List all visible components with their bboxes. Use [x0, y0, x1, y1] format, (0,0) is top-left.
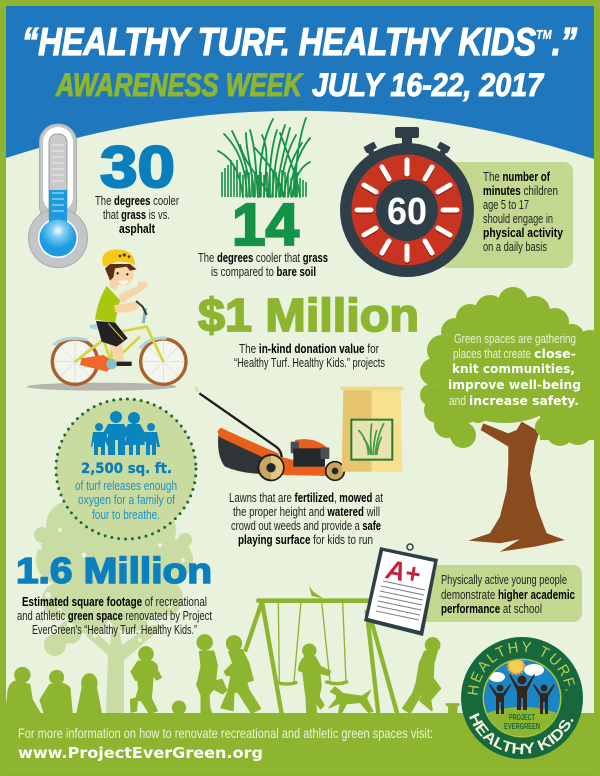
stat: 1.6 Million: Estimated square footage of recreational: [22, 594, 207, 609]
text: lawn care: [229, 490, 383, 547]
stat: $1 Million: $1 Million: [198, 289, 419, 341]
icon: grass: [218, 118, 310, 197]
icon: clipboard with A+: A+: [383, 554, 423, 590]
stat: 14 degrees: The degrees cooler that grass: [198, 250, 328, 265]
silhouette: swing set: [245, 586, 397, 714]
illustration: tree with green spaces message: places that create: [453, 346, 531, 361]
panel: family oxygen circle: four to breathe.: [92, 507, 160, 522]
stat: 30 degrees: that grass is vs.: [103, 207, 170, 222]
stat: 30 degrees: 30: [100, 135, 175, 200]
text: lawn care: Lawns that are fertilized, mowed at: [229, 490, 383, 505]
icon: clipboard with A+: [364, 544, 438, 636]
stat: 1.6 Million: 1.6 Million: [16, 550, 212, 591]
stat: $1 Million: [198, 289, 419, 370]
text: lawn care: the proper height and watered will: [233, 504, 380, 519]
panel: family oxygen circle: [56, 399, 196, 539]
panel: family oxygen circle: of turf releases enough: [75, 478, 177, 493]
stat: 1.6 Million: EverGreen's “Healthy Turf. Healthy Kids.”: [32, 622, 197, 637]
illustration: lawn mower: [195, 387, 344, 480]
footer text: [18, 725, 433, 762]
subtitle: awareness week dates: JULY 16-22, 2017: [312, 67, 545, 103]
panel: academic performance callout: [415, 565, 582, 622]
panel: academic performance callout: performance at school: [441, 601, 542, 616]
icon: stopwatch: [340, 127, 474, 277]
stat: 14 degrees: 14: [232, 192, 299, 258]
stat: $1 Million: “Healthy Turf. Healthy Kids.” projects: [234, 355, 385, 370]
stat: $1 Million: The in-kind donation value for: [239, 341, 380, 356]
logo: Healthy Turf Healthy Kids badge: EVERGREEN: [504, 722, 540, 731]
stat: 14 degrees: [198, 192, 328, 279]
illustration: tree with green spaces message: improve well-being: [448, 378, 581, 392]
logo: Healthy Turf Healthy Kids badge: [461, 637, 583, 759]
stat: 1.6 Million: and athletic green space renovated by Project: [17, 608, 212, 623]
logo: Healthy Turf Healthy Kids badge: HEALTHY KIDS.: [469, 712, 574, 754]
logo: Healthy Turf Healthy Kids badge: PROJECT: [509, 713, 535, 722]
panel: academic performance callout: demonstrate higher academic: [441, 587, 575, 602]
illustration: tree with green spaces message: and: [449, 393, 466, 408]
panel: physical activity callout: The number of: [483, 169, 550, 184]
footer band: [0, 713, 600, 776]
illustration: tree with green spaces message: knit communities,: [452, 362, 575, 376]
illustration: tree with green spaces message: [420, 287, 600, 552]
title: TM: [536, 27, 553, 42]
illustration: tree with green spaces message: close-: [534, 347, 576, 361]
panel: family oxygen circle: 2,500 sq. ft.: [81, 461, 172, 477]
subtitle: awareness week dates: AWARENESS WEEK: [55, 67, 304, 103]
text: lawn care: crowd out weeds and provide a safe: [231, 518, 381, 533]
stat: 30 degrees: [95, 135, 179, 236]
silhouette: children and dog at swings: [197, 635, 459, 714]
background tree: [34, 501, 193, 713]
panel: physical activity callout: should engage in: [483, 211, 553, 226]
icon: family of four: [91, 411, 160, 455]
bicycle: [27, 308, 186, 391]
title: .”: [552, 21, 577, 64]
panel: physical activity callout: [440, 162, 573, 268]
boy: [95, 249, 148, 347]
stat: 30 degrees: asphalt: [119, 221, 156, 236]
tree canopy: [420, 287, 600, 448]
text: lawn care: playing surface for kids to run: [238, 532, 373, 547]
subtitle: awareness week dates: [55, 67, 545, 103]
panel: physical activity callout: minutes children: [483, 183, 558, 198]
panel: physical activity callout: physical activity: [483, 225, 564, 240]
tree trunk: [468, 422, 565, 552]
footer text: www.ProjectEverGreen.org: [18, 744, 263, 762]
logo: Healthy Turf Healthy Kids badge: HEALTHY TURF.: [468, 641, 576, 695]
silhouette: seated and running children: [6, 647, 185, 714]
header: blue band: [0, 0, 600, 159]
panel: family oxygen circle: oxygen for a family of: [78, 492, 175, 507]
illustration: fertilizer bag: [340, 387, 403, 472]
panel: physical activity callout: age 5 to 17: [483, 197, 529, 212]
panel: physical activity callout: on a daily basis: [483, 239, 547, 254]
illustration: tree with green spaces message: increase safety.: [469, 394, 579, 408]
stat: 1.6 Million: [16, 550, 212, 637]
stat: 30 degrees: The degrees cooler: [95, 193, 179, 208]
icon: stopwatch: 60: [387, 191, 427, 233]
illustration: boy on bicycle: [27, 249, 186, 391]
stat: 14 degrees: is compared to bare soil: [211, 264, 316, 279]
footer text: For more information on how to renovate recreational and athletic green spaces visit:: [18, 725, 433, 741]
icon: thermometer: [28, 124, 88, 268]
